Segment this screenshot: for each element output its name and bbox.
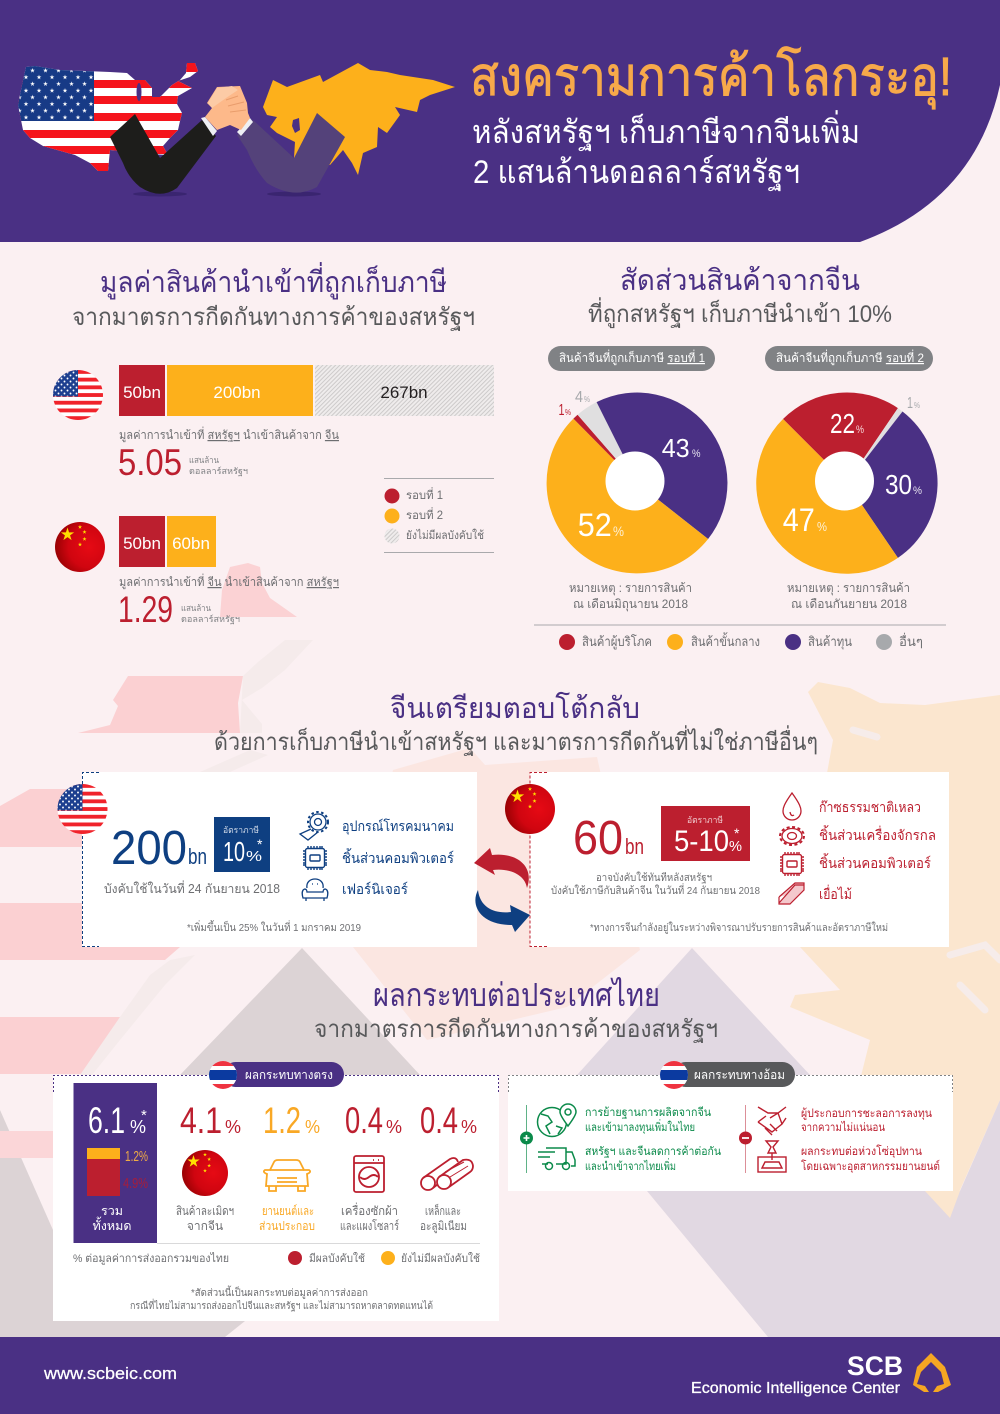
legend: goods type: สินค้าผู้บริโภค	[582, 634, 652, 650]
list: goods: ชิ้นส่วนคอมพิวเตอร์	[819, 853, 931, 871]
panel: US 200bn tariffs: %	[246, 848, 262, 865]
legend: goods type: อื่นๆ	[899, 633, 923, 649]
left arm: black sleeve	[110, 114, 216, 194]
list: goods: ชิ้นส่วนคอมพิวเตอร์	[342, 848, 454, 866]
total box: ทั้งหมด	[93, 1216, 131, 1233]
illustration: arm wrestling USA and Asia maps	[15, 60, 455, 196]
website: www.scbeic.com	[43, 1364, 177, 1383]
text: green points: สหรัฐฯ และจีนลดการค้าต่อกัน	[585, 1145, 721, 1158]
value: 0.4% steel: เหล็กและ	[425, 1203, 461, 1218]
tariff box	[661, 806, 750, 861]
legend: goods type: สินค้าทุน	[808, 634, 852, 650]
value: 0.4% steel	[420, 1100, 477, 1234]
legend: enforcement	[288, 1251, 480, 1265]
panel: China 60bn tariffs: *	[734, 825, 740, 841]
panel: US 200bn tariffs: *	[257, 836, 263, 852]
brand name: SCB	[847, 1351, 903, 1381]
pie chart: round 1: %	[584, 395, 590, 404]
list: goods: อุปกรณ์โทรคมนาคม	[342, 818, 454, 835]
cuffs	[201, 117, 253, 136]
panel: China 60bn tariffs: อัตราภาษี	[687, 815, 723, 825]
heading: China share: สัดส่วนสินค้าจากจีน	[620, 265, 860, 297]
value: 200bn: 200	[111, 822, 187, 875]
icon: car	[264, 1160, 310, 1191]
right arm: grey sleeve	[237, 113, 345, 193]
panel: US 200bn tariffs: 10	[223, 836, 245, 867]
logo: SCB shell	[913, 1353, 951, 1392]
list: goods: ก๊าซธรรมชาติเหลว	[819, 799, 921, 815]
value: 4.1% China goods: สินค้าละเมิดฯ	[176, 1204, 234, 1218]
bar chart: US	[119, 365, 494, 416]
heading: import value: มูลค่าสินค้านำเข้าที่ถูกเก็บภาษี	[100, 262, 447, 300]
panel: US tariffs	[53, 365, 494, 483]
tariff box	[214, 817, 270, 872]
value: 4.1% China goods	[176, 1100, 241, 1233]
bar chart: China: 60bn	[172, 534, 210, 553]
value: 60bn: 60	[573, 812, 623, 865]
legend: enforcement: ยังไม่มีผลบังคับใช้	[401, 1252, 480, 1265]
heading: impact on Thailand: ผลกระทบต่อประเทศไทย	[373, 977, 660, 1013]
heading: China retaliates: ด้วยการเก็บภาษีนำเข้าสหรัฐฯ และมาตรการกีดกันที่ไม่ใช่ภาษีอื่นๆ	[214, 725, 818, 756]
total box: 4.9%	[123, 1175, 148, 1192]
effective date: อาจบังคับใช้ทันทีหลังสหรัฐฯ	[596, 871, 712, 884]
effective date: บังคับใช้ในวันที่ 24 กันยายน 2018	[104, 880, 280, 896]
pie chart: round 1: %	[613, 523, 624, 539]
pie chart: round 2: %	[856, 424, 864, 436]
icon: pipes	[421, 1158, 473, 1190]
label pill	[548, 346, 715, 371]
panel: China 60bn tariffs: 5-10	[674, 825, 729, 858]
legend: tariff rounds: รอบที่ 2	[406, 507, 443, 522]
icon: US flag	[58, 784, 108, 834]
panel: China 60bn tariffs: bn	[625, 834, 644, 859]
text: red points: จากความไม่แน่นอน	[801, 1121, 885, 1134]
total box: 1.2%	[125, 1148, 148, 1165]
subtitle: 2 แสนล้านดอลลาร์สหรัฐฯ	[473, 154, 800, 192]
unit	[189, 455, 248, 477]
icon: China flag	[55, 522, 105, 572]
values: 43	[662, 433, 690, 463]
map: Asia	[263, 63, 455, 175]
label pill	[765, 346, 933, 371]
value: 1.2% autos: %	[305, 1117, 320, 1137]
note: หมายเหตุ : รายการสินค้า	[569, 581, 692, 596]
icon: US flag	[53, 370, 103, 420]
heading: China retaliates	[214, 691, 818, 756]
list: goods: เฟอร์นิเจอร์	[342, 881, 408, 897]
panel: US 200bn tariffs	[58, 772, 477, 947]
panel: China 60bn tariffs: บังคับใช้ภาษีกับสินค้าจีน ในวันที่ 24 กันยายน 2018	[551, 883, 760, 897]
pie chart: round 2: 30	[885, 469, 912, 500]
icon: chip	[780, 852, 804, 876]
text: red points: โดยเฉพาะอุตสาหกรรมยานยนต์	[801, 1159, 940, 1173]
values: 22	[830, 408, 855, 439]
list: goods: ชิ้นส่วนเครื่องจักรกล	[819, 825, 936, 843]
clasped hands	[205, 86, 250, 130]
value: 0.4% washers: เครื่องซักผ้า	[341, 1202, 398, 1218]
pill: direct impact label	[209, 1061, 344, 1089]
bar chart: China	[119, 516, 216, 567]
header banner	[0, 0, 1000, 242]
value: 1.2% autos: ยานยนต์และ	[262, 1204, 314, 1218]
footnote	[130, 1285, 433, 1312]
footnote: *ทางการจีนกำลังอยู่ในระหว่างพิจารณาปรับรายการสินค้าและอัตราภาษีใหม่	[590, 921, 888, 934]
list: goods	[342, 818, 454, 897]
legend: goods type: สินค้าขั้นกลาง	[691, 632, 760, 649]
pie chart: round 1: ณ เดือนมิถุนายน 2018	[573, 597, 688, 612]
value: 4.1% China goods: %	[225, 1117, 241, 1137]
pie chart: round 1	[547, 346, 727, 612]
pill: direct impact label: ผลกระทบทางตรง	[245, 1068, 333, 1082]
value: 0.4% washers	[340, 1100, 402, 1233]
value: 0.4% washers: %	[386, 1117, 402, 1137]
heading: China share: ที่ถูกสหรัฐฯ เก็บภาษีนำเข้า 10%	[588, 297, 892, 329]
icon: China flag	[505, 784, 555, 834]
pie chart: round 2	[756, 346, 938, 611]
text: red points: ผู้ประกอบการชะลอการลงทุน	[801, 1107, 932, 1120]
unit: ดอลลาร์สหรัฐฯ	[189, 466, 248, 477]
pie chart: round 2: 47	[783, 502, 815, 538]
icon: sofa	[302, 879, 328, 901]
heading: import value	[72, 262, 475, 331]
panel: direct impact	[53, 1061, 499, 1321]
bar chart: US: 200bn	[213, 383, 261, 402]
note: หมายเหตุ : รายการสินค้า	[787, 581, 910, 596]
heading: China retaliates: จีนเตรียมตอบโต้กลับ	[390, 691, 640, 725]
pie chart: round 2: %	[913, 485, 922, 497]
heading: impact on Thailand	[314, 977, 718, 1043]
legend: tariff rounds: ยังไม่มีผลบังคับใช้	[406, 529, 484, 542]
pie chart: round 2: 1	[907, 395, 913, 412]
pie chart: round 2: %	[817, 519, 827, 534]
legend: tariff rounds: รอบที่ 1	[406, 487, 443, 502]
pie chart: round 1: 4	[575, 389, 583, 406]
bar chart: China: 50bn	[123, 534, 161, 553]
legend: tariff rounds	[384, 478, 494, 552]
footnote: *สัดส่วนนี้เป็นผลกระทบต่อมูลค่าการส่งออก	[191, 1285, 368, 1299]
list: goods: เยื่อไม้	[819, 885, 852, 902]
legend: goods type	[534, 625, 946, 650]
pie chart: round 2: ณ เดือนกันยายน 2018	[791, 597, 907, 611]
icon: handshake	[758, 1107, 786, 1135]
text: red points	[801, 1107, 940, 1173]
pie slices	[596, 393, 727, 539]
legend: enforcement: มีผลบังคับใช้	[309, 1252, 365, 1265]
footnote: กรณีที่ไทยไม่สามารถส่งออกไปจีนและสหรัฐฯ และไม่สามารถหาตลาดทดแทนได้	[130, 1298, 433, 1312]
value: 0.4% washers: และแผงโซลาร์	[340, 1219, 399, 1233]
icon: globe pin	[538, 1104, 576, 1136]
value: 0.4% washers: 0.4	[345, 1100, 383, 1141]
pie chart: round 1: 1	[558, 402, 565, 419]
value: 4.1% China goods: 4.1	[180, 1100, 222, 1141]
pie chart: round 2: สินค้าจีนที่ถูกเก็บภาษี รอบที่ 2	[776, 349, 924, 366]
panel: US 200bn tariffs: อัตราภาษี	[223, 825, 259, 835]
panel: indirect impact	[508, 1061, 953, 1191]
list: goods	[819, 799, 936, 902]
text: green points: และเข้ามาลงทุนเพิ่มในไทย	[585, 1119, 695, 1134]
value: 1.29: 1.29	[118, 589, 173, 630]
pie chart: round 1: %	[692, 448, 701, 460]
icon: car lift	[758, 1141, 786, 1172]
pill: indirect impact label: ผลกระทบทางอ้อม	[694, 1068, 785, 1082]
pie chart: round 1: %	[565, 408, 571, 417]
text: green points: และนำเข้าจากไทยเพิ่ม	[585, 1158, 676, 1173]
icon: chip	[303, 846, 327, 870]
unit: แสนล้าน	[181, 603, 211, 613]
value: 0.4% steel: 0.4	[420, 1100, 458, 1141]
value: 4.1% China goods: จากจีน	[187, 1219, 223, 1233]
icon: washing machine	[354, 1156, 384, 1192]
text: import description: มูลค่าการนำเข้าที่ สหรัฐฯ นำเข้าสินค้าจาก จีน	[119, 426, 339, 443]
footnote: *เพิ่มขึ้นเป็น 25% ในวันที่ 1 มกราคม 2019	[187, 920, 361, 934]
total box: รวม	[101, 1204, 123, 1218]
heading: import value: จากมาตรการกีดกันทางการค้าของสหรัฐฯ	[72, 304, 475, 331]
chart note: % ต่อมูลค่าการส่งออกรวมของไทย	[73, 1252, 229, 1265]
bar chart: US: 267bn	[380, 383, 428, 402]
unit: แสนล้าน	[189, 455, 219, 465]
text: red points: ผลกระทบต่อห่วงโซ่อุปทาน	[801, 1144, 922, 1158]
value: 5.05: 5.05	[118, 442, 182, 483]
shadows	[133, 192, 187, 196]
icon: telecom	[300, 812, 328, 840]
text: green points	[585, 1106, 721, 1173]
value: 1.2% autos: 1.2	[263, 1100, 301, 1141]
text: import description: มูลค่าการนำเข้าที่ จีน นำเข้าสินค้าจาก สหรัฐฯ	[119, 573, 339, 590]
panel: US 200bn tariffs: bn	[188, 844, 207, 869]
pill: indirect impact label	[660, 1061, 795, 1089]
heading: China share	[588, 265, 892, 329]
subtitle: หลังสหรัฐฯ เก็บภาษีจากจีนเพิ่ม	[472, 110, 860, 152]
bar chart: US: 50bn	[123, 383, 161, 402]
icon: wood	[779, 883, 804, 904]
pie chart: round 1: สินค้าจีนที่ถูกเก็บภาษี รอบที่ 1	[559, 349, 705, 366]
map: USA flag	[18, 63, 198, 171]
arrow: red retaliation	[474, 848, 529, 888]
panel: China tariffs	[55, 516, 339, 630]
unit: ดอลลาร์สหรัฐฯ	[181, 614, 240, 625]
icon: gas drop	[783, 793, 801, 820]
icon: machine gear	[780, 827, 804, 845]
unit	[181, 603, 240, 625]
total box	[74, 1083, 157, 1243]
footer	[0, 1337, 1000, 1414]
panel: China 60bn tariffs	[505, 772, 949, 947]
value: 1.2% autos	[259, 1100, 320, 1233]
negative side	[739, 1105, 940, 1173]
value: 1.2% autos: ส่วนประกอบ	[259, 1219, 315, 1233]
icon: truck	[538, 1148, 575, 1170]
text: green points: การย้ายฐานการผลิตจากจีน	[585, 1106, 711, 1119]
value: 0.4% steel: %	[461, 1117, 477, 1137]
subtitle	[472, 110, 860, 192]
background: faded maps and triangles	[0, 563, 1000, 1337]
total box: %	[130, 1117, 146, 1137]
arrow: blue retaliation	[475, 890, 530, 932]
total box: 6.1	[88, 1100, 125, 1141]
pie chart: round 1: 52	[578, 507, 612, 543]
value: 0.4% steel: อะลูมิเนียม	[420, 1219, 467, 1234]
footer: Economic Intelligence Center	[691, 1380, 900, 1397]
pie chart: round 2: %	[914, 401, 920, 410]
panel: China 60bn tariffs: %	[729, 838, 742, 855]
pie slices	[783, 392, 898, 483]
positive side	[520, 1104, 721, 1173]
heading: impact on Thailand: จากมาตรการกีดกันทางการค้าของสหรัฐฯ	[314, 1016, 718, 1043]
total box: *	[141, 1107, 147, 1124]
